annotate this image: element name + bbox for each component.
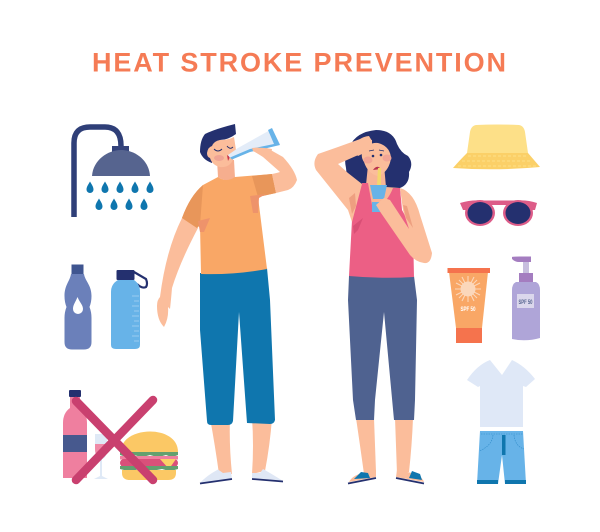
man trousers	[200, 268, 275, 425]
icon: sunscreen pump bottle	[512, 256, 540, 340]
man right arm	[252, 148, 297, 193]
icon: blue shorts	[477, 431, 526, 484]
woman trousers	[348, 276, 417, 420]
icon: sports water bottle	[111, 270, 147, 349]
burger	[120, 432, 178, 480]
icon: white t-shirt	[467, 360, 535, 427]
woman lower legs	[356, 418, 413, 474]
woman hair	[345, 130, 411, 188]
woman holding a drink	[314, 130, 432, 484]
icon: blue plastic water bottle	[64, 264, 92, 350]
man neck	[217, 160, 235, 180]
title: HEAT STROKE PREVENTION	[92, 48, 506, 78]
man head	[200, 124, 236, 167]
wine glass	[94, 434, 108, 479]
icon: sunscreen tube: SPF 50	[460, 307, 476, 313]
man shirt	[182, 174, 276, 274]
woman sandals	[348, 470, 424, 484]
woman tank top	[349, 183, 414, 278]
icon: crossed-out alcohol and junk food	[63, 390, 178, 480]
icon: yellow bucket hat	[453, 124, 540, 169]
woman head	[362, 143, 392, 176]
cup with straw	[370, 168, 387, 212]
woman right arm	[376, 188, 432, 263]
hand on forehead	[352, 136, 372, 156]
icon: sunscreen pump bottle: SPF 50	[518, 300, 533, 306]
man left arm	[157, 218, 198, 327]
woman neck and chest	[366, 165, 400, 208]
man lower legs	[210, 418, 272, 474]
icon: sunscreen tube	[448, 268, 490, 343]
icon: sunglasses	[460, 200, 537, 226]
man hand	[252, 148, 272, 160]
water bottle in hand	[228, 128, 280, 160]
icon: shower	[74, 127, 154, 217]
man drinking water	[157, 124, 297, 484]
red cross	[76, 400, 153, 480]
man shoes	[200, 469, 283, 484]
woman raised arm	[314, 138, 372, 222]
wine bottle	[63, 390, 87, 478]
sun symbol	[455, 276, 481, 302]
